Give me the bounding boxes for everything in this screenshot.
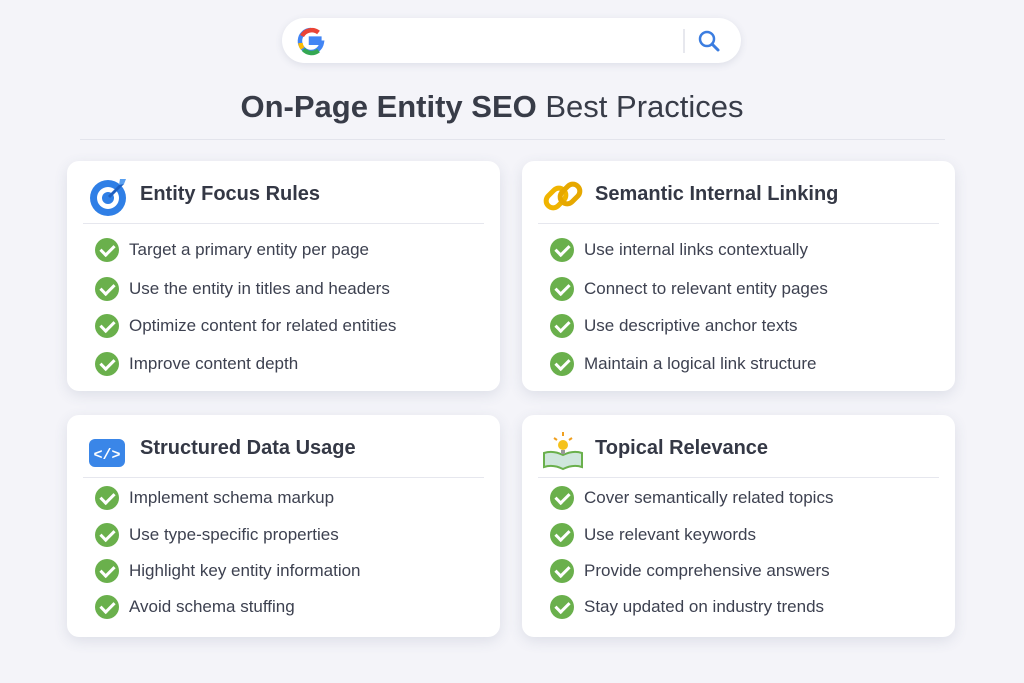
panel: entity focus rules: [67, 161, 500, 391]
panel: semantic internal linking: Use internal links contextually: [584, 240, 808, 259]
panel: topical relevance: Provide comprehensive answers: [584, 561, 830, 580]
panel: semantic internal linking: Maintain a logical link structure: [584, 354, 816, 373]
panel: structured data usage: Structured Data Usage: [140, 437, 356, 459]
icon: target: [90, 179, 126, 216]
icon: code: </>: [93, 447, 121, 464]
panel: topical relevance: Cover semantically related topics: [584, 488, 833, 507]
panel: topical relevance: [522, 415, 955, 637]
panel: entity focus rules: Improve content depth: [129, 354, 298, 373]
panel: topical relevance: Use relevant keywords: [584, 525, 756, 544]
panel: entity focus rules: Target a primary entity per page: [129, 240, 369, 259]
panel: entity focus rules: Use the entity in titles and headers: [129, 279, 390, 298]
panel: semantic internal linking: [522, 161, 955, 391]
panel: semantic internal linking: Semantic Internal Linking: [595, 183, 838, 205]
panel: structured data usage: Avoid schema stuffing: [129, 597, 295, 616]
panel: entity focus rules: Entity Focus Rules: [140, 183, 320, 205]
icon: google logo: [298, 28, 324, 56]
icon: code: [89, 439, 125, 467]
search bar: [282, 18, 741, 63]
panel: semantic internal linking: Connect to relevant entity pages: [584, 279, 828, 298]
panel: structured data usage: Implement schema markup: [129, 488, 334, 507]
panel: structured data usage: [67, 415, 500, 637]
panel: structured data usage: Use type-specific properties: [129, 525, 339, 544]
panel: structured data usage: Highlight key entity information: [129, 561, 361, 580]
icon: book with bulb: [543, 432, 583, 470]
icon: search: [683, 29, 720, 53]
panel: topical relevance: Topical Relevance: [595, 437, 768, 459]
title: On-Page Entity SEO Best Practices: [240, 89, 744, 124]
panel: entity focus rules: Optimize content for related entities: [129, 316, 396, 335]
icon: chain link: [544, 182, 582, 210]
panel: topical relevance: Stay updated on industry trends: [584, 597, 824, 616]
panel: semantic internal linking: Use descriptive anchor texts: [584, 316, 798, 335]
